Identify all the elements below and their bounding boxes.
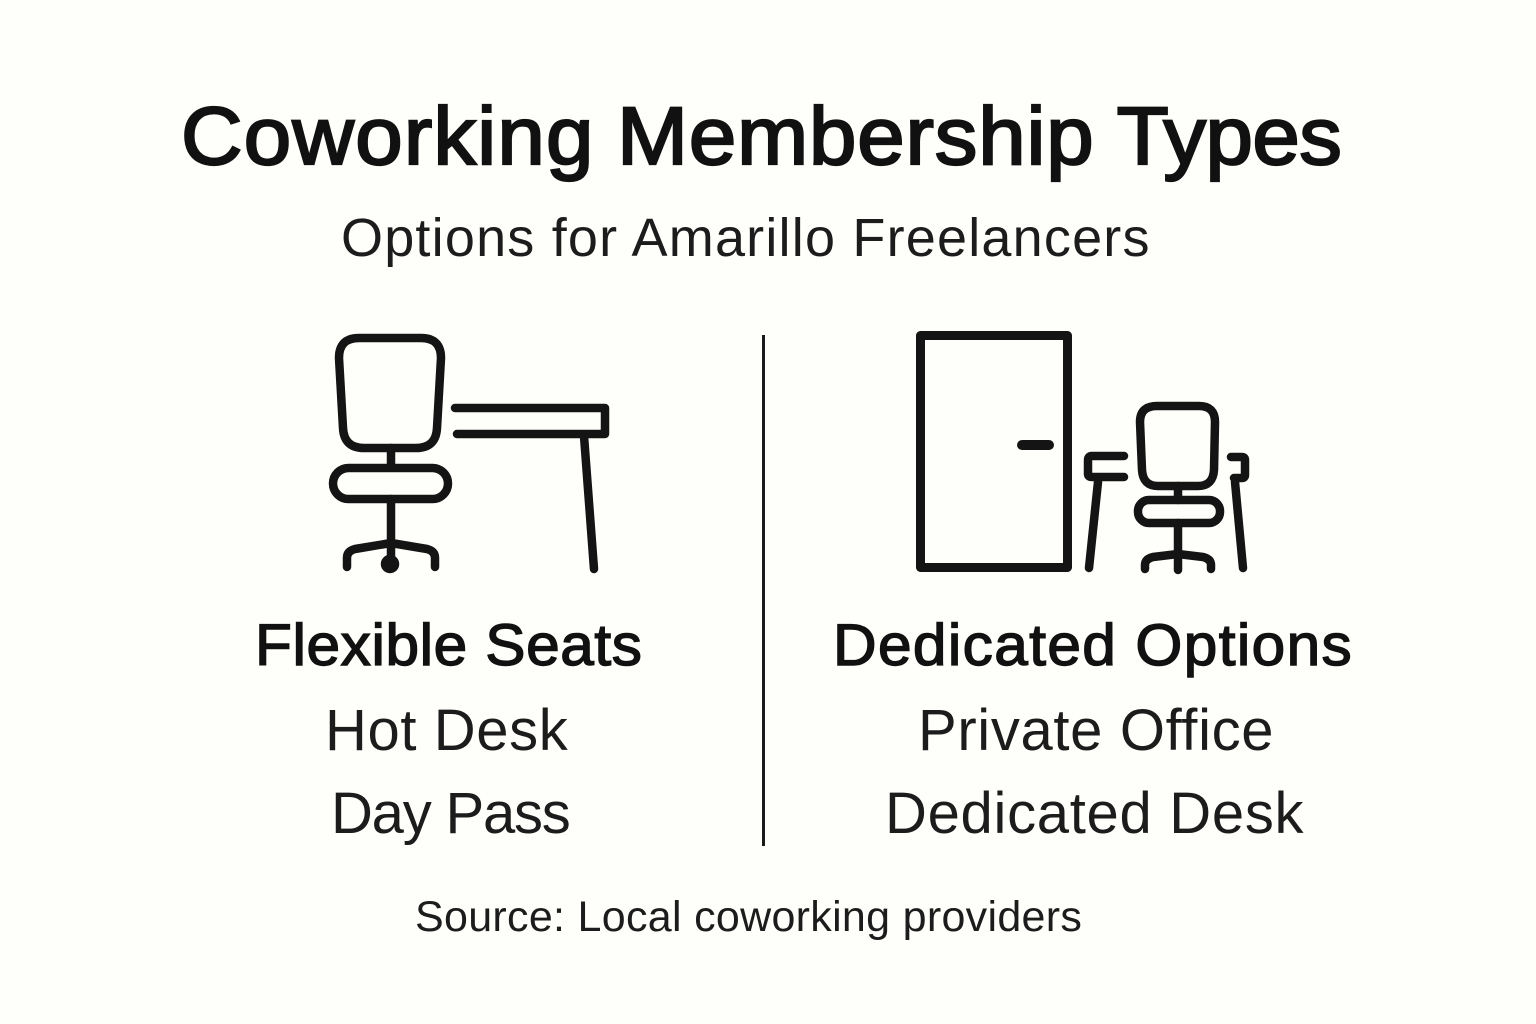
heading: Flexible Seats: Flexible Seats <box>255 613 643 678</box>
subtitle: Options for Amarillo Freelancers <box>341 208 1151 268</box>
text: Hot Desk: Hot Desk <box>325 698 568 763</box>
text: Private Office: Private Office <box>918 698 1274 763</box>
source note: Source: Local coworking providers <box>415 893 1082 941</box>
heading: Dedicated Options: Dedicated Options <box>833 613 1353 678</box>
text: Day Pass: Day Pass <box>331 781 570 846</box>
text: Dedicated Desk: Dedicated Desk <box>885 781 1304 846</box>
divider line between columns <box>762 335 764 846</box>
title: Coworking Membership Types <box>181 91 1341 182</box>
